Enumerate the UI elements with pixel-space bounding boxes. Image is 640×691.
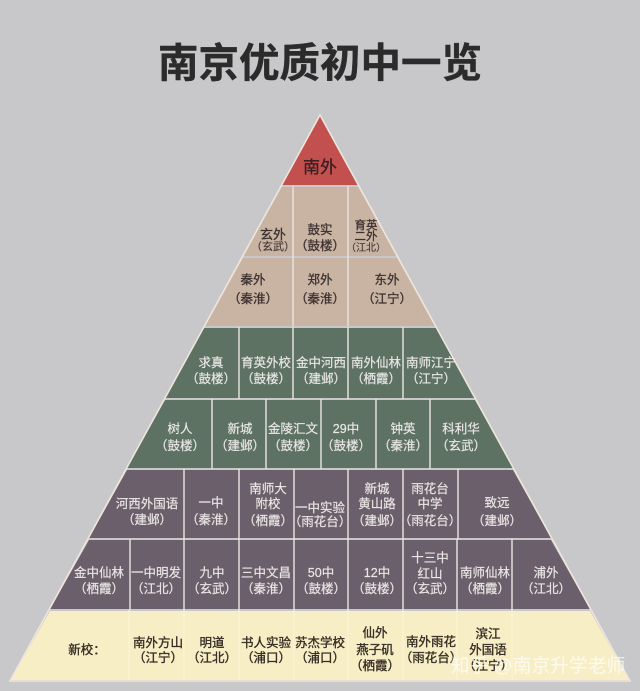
school: 雨花台中学: 雨花台 xyxy=(411,482,449,496)
school: 雨花台中学: （雨花台） xyxy=(399,513,461,528)
school: 金中仙林: 金中仙林 xyxy=(74,566,124,580)
school: 29中: （鼓楼） xyxy=(321,438,371,453)
school: 秦外: （秦淮） xyxy=(228,292,278,306)
school: 南师仙林: 南师仙林 xyxy=(460,566,510,580)
school: 南师江宁: 南师江宁 xyxy=(406,356,456,370)
school: 新城黄山路: 黄山路 xyxy=(358,496,396,511)
school: 明道: （江北） xyxy=(187,651,237,665)
school: 河西外国语: （建邺） xyxy=(122,513,172,527)
school: 致远: 致远 xyxy=(484,496,510,510)
school: 南外雨花: （雨花台） xyxy=(400,650,462,665)
school: 东外: 东外 xyxy=(374,273,400,287)
school: 育英外校: 育英外校 xyxy=(241,356,291,370)
watermark: 知乎 @南京升学老师 xyxy=(451,655,625,676)
tier: top school: 南外 xyxy=(303,158,337,177)
school: 苏杰学校: 苏杰学校 xyxy=(295,636,345,650)
label: new schools: 新校： xyxy=(68,642,106,657)
title: 南京优质初中一览 xyxy=(158,40,482,86)
school: 一中: 一中 xyxy=(198,496,224,510)
school: 南外仙林: （栖霞） xyxy=(351,371,401,386)
school: 玄外: （玄武） xyxy=(251,239,295,253)
school: 12中: （鼓楼） xyxy=(352,581,402,596)
school: 南师大附校: 南师大 xyxy=(249,482,287,496)
school: 致远: （建邺） xyxy=(472,514,522,528)
school: 新城黄山路: 新城 xyxy=(364,482,390,496)
school: 书人实验: （浦口） xyxy=(241,651,291,665)
pyramid xyxy=(10,115,630,681)
school: 新城: 新城 xyxy=(227,422,253,436)
school: 求真: （鼓楼） xyxy=(186,371,236,386)
school: 苏杰学校: （浦口） xyxy=(295,651,345,665)
school: 十三中红山: （玄武） xyxy=(405,581,455,596)
tier: second group upper row xyxy=(243,187,397,256)
school: 育英二外: 育英 xyxy=(354,220,378,232)
school: 十三中红山: 十三中 xyxy=(411,551,449,565)
school: 树人: 树人 xyxy=(167,422,193,436)
school: 新城: （建邺） xyxy=(215,439,265,453)
school: 十三中红山: 红山 xyxy=(417,566,443,581)
school: 树人: （鼓楼） xyxy=(155,438,205,453)
school: 金陵汇文: （鼓楼） xyxy=(268,438,318,453)
school: 郑外: （秦淮） xyxy=(295,292,345,306)
school: 育英外校: （鼓楼） xyxy=(241,371,291,386)
school: 玄外: 玄外 xyxy=(260,227,286,242)
school: 明道: 明道 xyxy=(199,636,225,650)
school: 九中: （玄武） xyxy=(187,581,237,596)
tier: fourth group lower row xyxy=(50,540,590,609)
school: 求真: 求真 xyxy=(198,356,224,370)
tier: third group upper row xyxy=(165,328,475,398)
tier: new schools xyxy=(11,611,629,680)
school: 钟英: 钟英 xyxy=(390,422,416,436)
school: 南师大附校: （栖霞） xyxy=(243,513,293,528)
tier: fourth group upper row xyxy=(89,470,551,538)
school: 仙外燕子矶: （栖霞） xyxy=(350,658,400,673)
school: 浦外: 浦外 xyxy=(533,566,559,580)
school: 东外: （江宁） xyxy=(362,291,412,306)
school: 金中河西: （建邺） xyxy=(296,372,346,386)
school: 金陵汇文: 金陵汇文 xyxy=(268,422,318,436)
school: 南外方山: （江宁） xyxy=(133,650,183,665)
school: 三中文昌: 三中文昌 xyxy=(241,566,291,580)
school: 育英二外: 二外 xyxy=(354,230,378,243)
school: 一中明发: 一中明发 xyxy=(131,566,181,580)
school: 南外仙林: 南外仙林 xyxy=(351,356,401,370)
school: 12中: 12中 xyxy=(364,566,390,580)
school: 一中: （秦淮） xyxy=(186,513,236,527)
school: 一中明发: （江北） xyxy=(131,582,181,596)
school: 50中: （鼓楼） xyxy=(296,581,346,596)
tier: second group lower row xyxy=(204,258,436,326)
school: 29中: 29中 xyxy=(333,422,359,436)
school: 三中文昌: （秦淮） xyxy=(241,582,291,596)
school: 河西外国语: 河西外国语 xyxy=(116,497,178,511)
school: 郑外: 郑外 xyxy=(307,273,333,287)
school: 滨江外国语: （江宁） xyxy=(463,658,513,673)
school: 50中: 50中 xyxy=(308,566,334,580)
school: 仙外燕子矶: 仙外 xyxy=(362,626,388,640)
school: 鼓实: 鼓实 xyxy=(307,223,333,237)
school: 一中实验: （雨花台） xyxy=(289,514,351,529)
school: 滨江外国语: 滨江 xyxy=(475,627,501,641)
school: 浦外: （江北） xyxy=(521,582,571,596)
school: 南师仙林: （栖霞） xyxy=(460,581,510,596)
school: 一中实验: 一中实验 xyxy=(295,501,345,515)
school: 科利华: （玄武） xyxy=(436,438,486,453)
school: 南外雨花: 南外雨花 xyxy=(406,635,456,649)
school: 南外方山: 南外方山 xyxy=(133,636,183,650)
school: 秦外: 秦外 xyxy=(240,273,266,287)
school: 钟英: （秦淮） xyxy=(378,439,428,453)
school: 金中仙林: （栖霞） xyxy=(74,581,124,596)
school: 九中: 九中 xyxy=(199,566,225,580)
school: 书人实验: 书人实验 xyxy=(241,636,291,650)
school: 科利华: 科利华 xyxy=(442,422,480,436)
school: 仙外燕子矶: 燕子矶 xyxy=(356,643,394,657)
school: 滨江外国语: 外国语 xyxy=(469,643,507,657)
school: 金中河西: 金中河西 xyxy=(296,356,346,370)
tier: top school xyxy=(282,116,358,185)
school: 雨花台中学: 中学 xyxy=(417,496,443,511)
school: 育英二外: （江北） xyxy=(346,242,386,254)
school: 南师大附校: 附校 xyxy=(255,496,281,511)
school: 鼓实: （鼓楼） xyxy=(295,238,345,253)
school: 新城黄山路: （建邺） xyxy=(352,514,402,528)
tier: third group lower row xyxy=(127,400,513,468)
school: 南师江宁: （江宁） xyxy=(406,371,456,386)
